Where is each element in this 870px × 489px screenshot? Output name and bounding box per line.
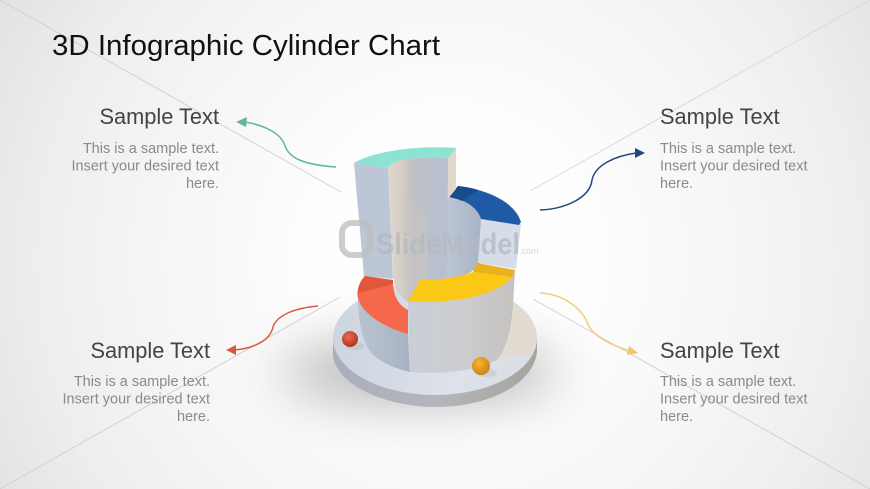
lower cylinder side: right of cut: [408, 270, 515, 373]
cast shadow: [280, 340, 560, 404]
callout: top left: [72, 104, 219, 192]
body text: bottom left: Insert your desired text: [62, 392, 210, 408]
lower cylinder side: left of cut: [358, 298, 410, 372]
title: 3D Infographic Cylinder Chart: [52, 30, 440, 62]
body text: bottom left: This is a sample text.: [74, 374, 210, 390]
sphere: red: [342, 331, 364, 350]
body text: bottom left: here.: [177, 409, 210, 425]
body text: top left: Insert your desired text: [72, 158, 219, 174]
arrow: yellow: [540, 293, 638, 355]
body text: bottom right: here.: [660, 409, 693, 425]
upper cylinder: inner core: [447, 197, 481, 280]
body text: top right: here.: [660, 176, 693, 192]
base disc: [333, 281, 537, 407]
concave face of tall segment: [388, 157, 448, 302]
watermark logo: SlideModel: [376, 228, 520, 261]
sphere: orange: [472, 357, 497, 377]
body text: top right: Insert your desired text: [660, 158, 808, 174]
arrow: blue: [540, 148, 645, 210]
blue segment side: [478, 219, 521, 269]
blue segment top: [449, 186, 521, 225]
heading: bottom right: Sample Text: [660, 338, 780, 363]
yellow segment top: [408, 263, 515, 302]
watermark logo: [342, 223, 539, 261]
callout: bottom right: [660, 338, 808, 425]
body text: bottom right: This is a sample text.: [660, 374, 796, 390]
body text: top left: This is a sample text.: [83, 141, 219, 157]
callout: top right: [660, 104, 808, 192]
callout: bottom left: [62, 338, 210, 425]
body text: top right: This is a sample text.: [660, 141, 796, 157]
teal segment top: [354, 147, 456, 168]
heading: bottom left: Sample Text: [90, 338, 210, 363]
heading: top left: Sample Text: [99, 104, 219, 129]
heading: top right: Sample Text: [660, 104, 780, 129]
body text: bottom right: Insert your desired text: [660, 392, 808, 408]
beige right edge: [447, 148, 456, 200]
watermark logo: .com: [519, 246, 539, 256]
tall segment left face: [354, 163, 393, 279]
arrow: red: [226, 306, 318, 355]
arrow: teal: [236, 117, 336, 167]
3D cylinder chart: [280, 147, 560, 407]
body text: top left: here.: [186, 176, 219, 192]
red segment top: [357, 276, 408, 334]
